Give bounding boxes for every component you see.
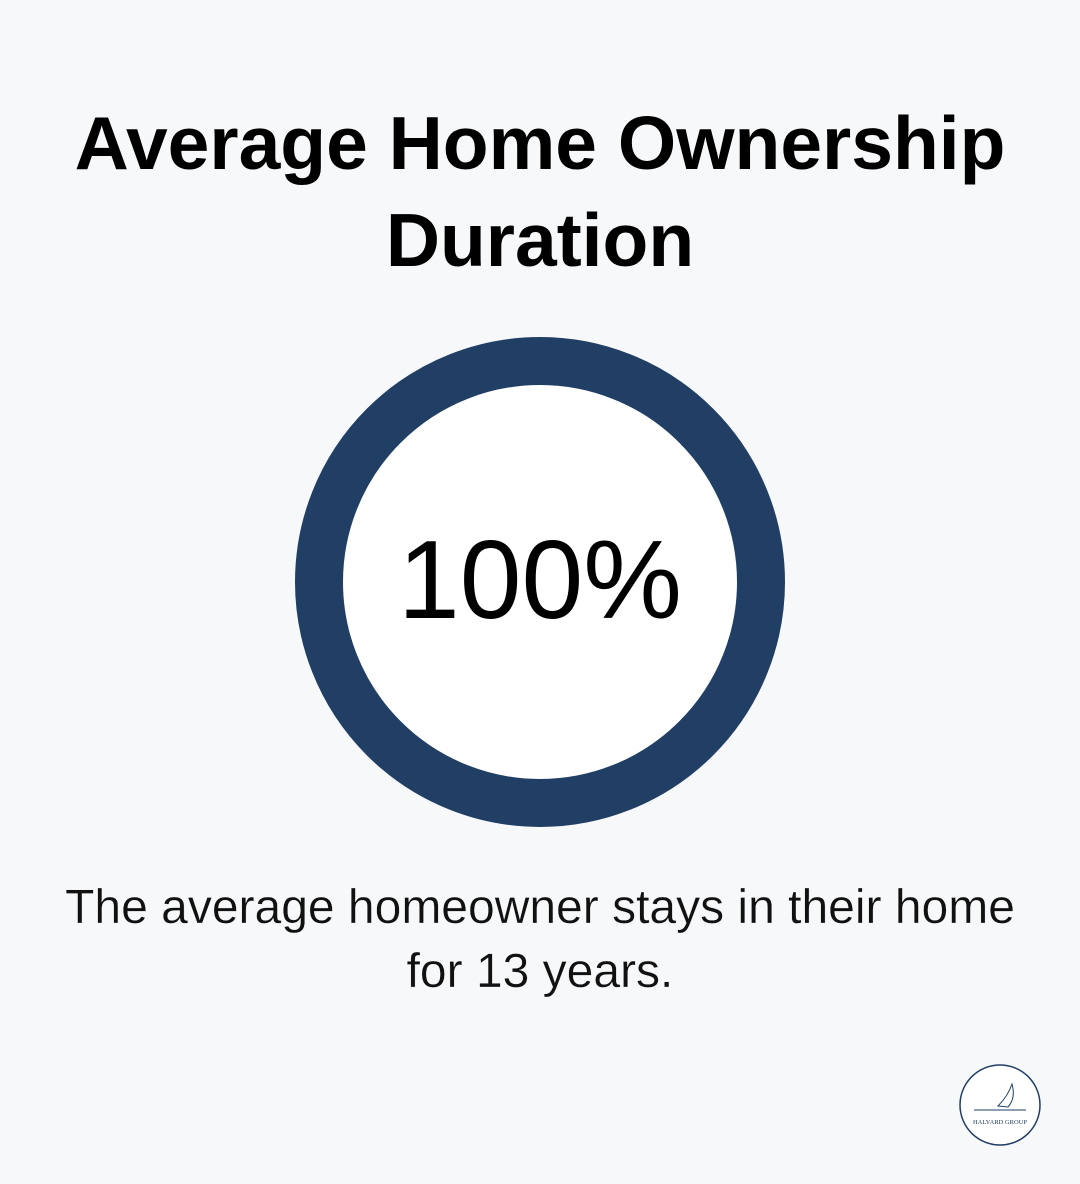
description text: for 13 years. [407, 945, 673, 998]
logo: Halyard Group [959, 1064, 1041, 1146]
title: Average Home Ownership [75, 101, 1005, 185]
title [75, 101, 1005, 282]
percentage label: 100% [398, 518, 682, 642]
description text [65, 881, 1015, 998]
description text: The average homeowner stays in their home [65, 881, 1015, 934]
title: Duration [386, 198, 694, 282]
logo: Halyard Group: HALYARD GROUP [973, 1119, 1027, 1126]
